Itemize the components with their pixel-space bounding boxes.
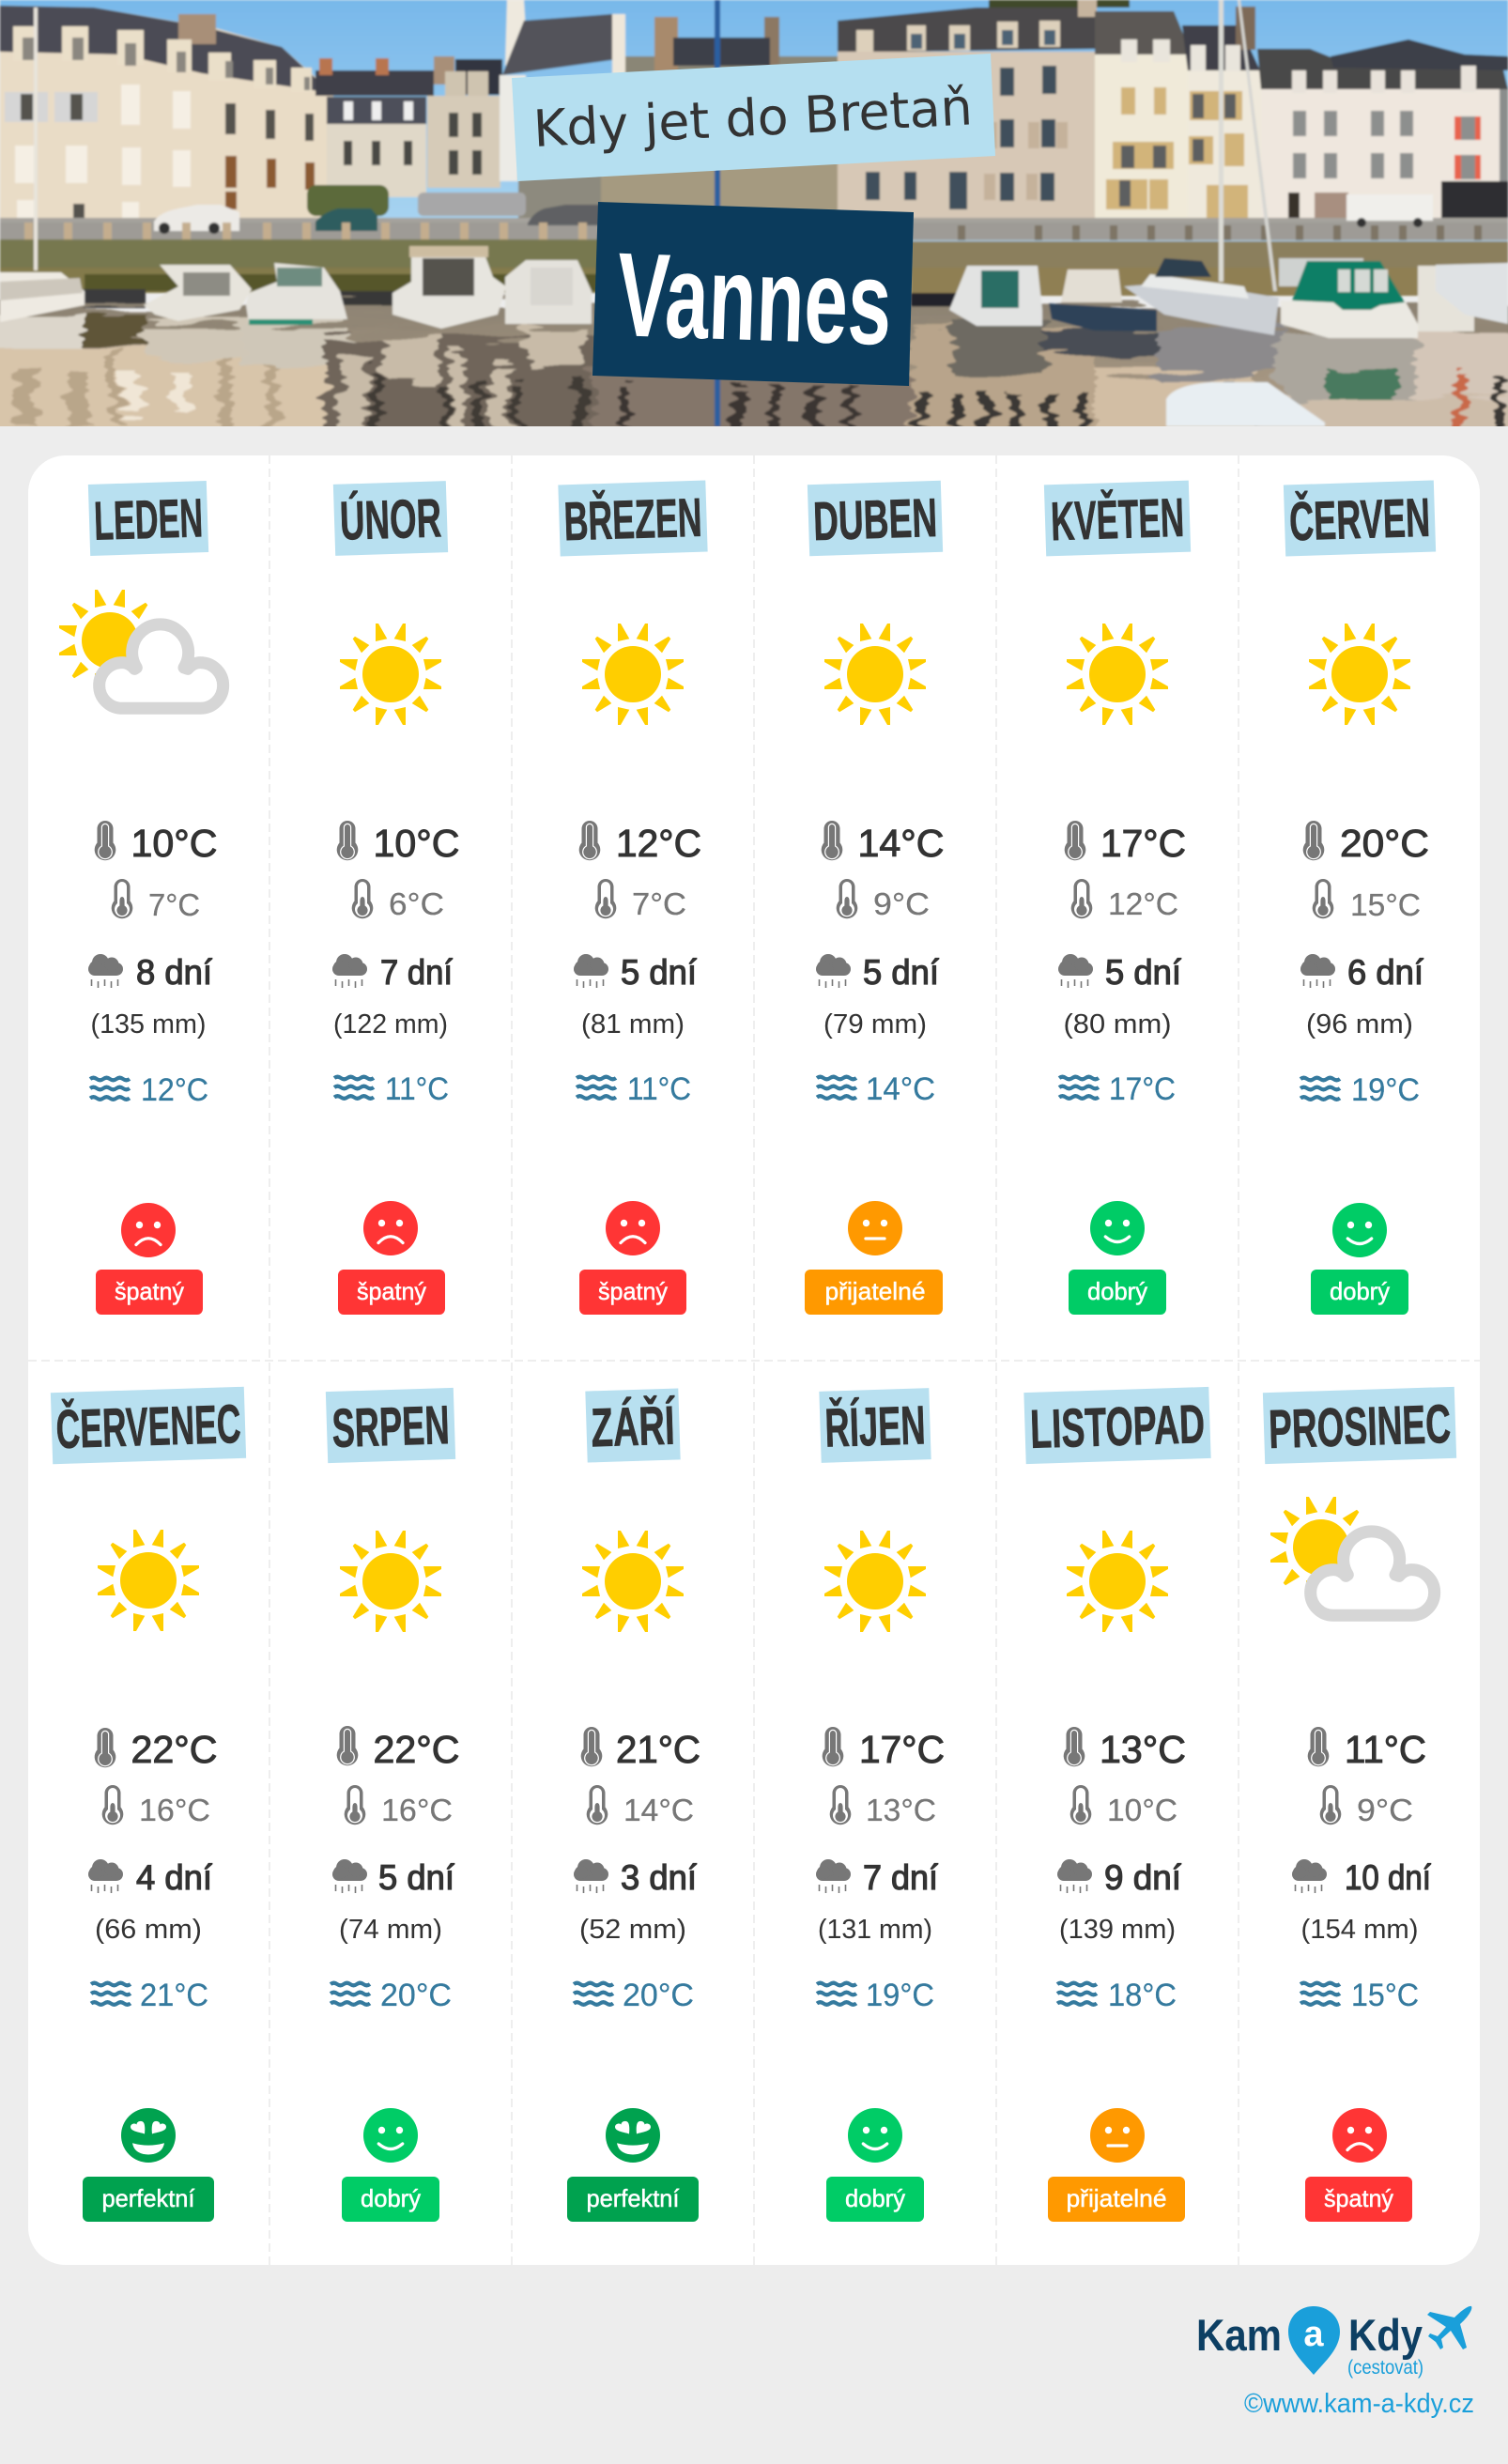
rating badge: špatný [1324, 2184, 1393, 2212]
banner: Vannes: Vannes [615, 227, 894, 370]
low temperature [1320, 1785, 1413, 1827]
icon: map pin: a [1303, 2315, 1324, 2354]
rating badge [83, 2177, 214, 2222]
month label [819, 1388, 931, 1463]
high temperature: 22°C [374, 1728, 460, 1771]
month label: SRPEN [331, 1394, 451, 1459]
rainy days: 5 dní [1105, 953, 1182, 992]
rating face [121, 1203, 176, 1257]
low temperature: 16°C [139, 1793, 210, 1827]
dock [75, 289, 146, 308]
high temperature [95, 821, 218, 865]
icon: sun [582, 1531, 684, 1632]
rating badge [826, 2177, 924, 2222]
high temperature [1308, 1727, 1426, 1771]
rainy days: 3 dní [621, 1858, 698, 1897]
water temperature: 17°C [1109, 1071, 1176, 1107]
rating badge: dobrý [845, 2184, 905, 2212]
street [0, 218, 1508, 240]
rainy days [88, 953, 213, 992]
water temperature [331, 1978, 452, 2013]
month label: KVĚTEN [1050, 487, 1185, 552]
rating face [606, 2108, 660, 2163]
high temperature: 13°C [1100, 1728, 1186, 1771]
high temperature: 14°C [858, 822, 945, 865]
rating badge [1305, 2177, 1412, 2222]
month label [585, 1388, 681, 1463]
rainy days: 5 dní [378, 1858, 455, 1897]
month: září [567, 1388, 700, 2222]
rating badge [567, 2177, 699, 2222]
rainy days [332, 953, 454, 992]
high temperature: 11°C [1345, 1728, 1426, 1771]
right stone building [838, 8, 1095, 53]
icon: sun [1067, 1531, 1168, 1632]
rating badge [805, 1270, 943, 1315]
water temperature [817, 1978, 934, 2013]
month label [558, 481, 708, 556]
icon: airplane [1427, 2306, 1471, 2349]
low temperature: 10°C [1107, 1793, 1177, 1827]
rating badge [579, 1270, 686, 1315]
rainfall: (80 mm) [1063, 1009, 1172, 1040]
rainy days: 5 dní [621, 953, 698, 992]
rating badge: dobrý [361, 2184, 421, 2212]
low temperature [595, 879, 686, 921]
high temperature [581, 1727, 700, 1771]
rainy days: 10 dní [1345, 1858, 1432, 1897]
month label: LISTOPAD [1029, 1394, 1206, 1460]
icon: partly cloudy [59, 590, 223, 708]
month label [1023, 1387, 1211, 1464]
high temperature: 17°C [1100, 822, 1186, 865]
high temperature [579, 821, 701, 865]
rainy days: 6 dní [1347, 953, 1424, 992]
rating badge [1311, 1270, 1408, 1315]
water temperature: 19°C [866, 1978, 934, 2013]
high temperature: 20°C [1340, 822, 1429, 865]
logo: Kam a Kdy [1196, 2306, 1471, 2379]
high temperature [337, 1726, 460, 1771]
rating face [848, 1201, 902, 1255]
month label [326, 1388, 455, 1463]
water temperature: 11°C [385, 1071, 449, 1107]
month: červenec [51, 1387, 246, 2222]
rainfall: (139 mm) [1059, 1915, 1176, 1945]
high temperature [1303, 821, 1429, 865]
month label: DUBEN [812, 487, 938, 552]
month: červen [1284, 481, 1436, 1315]
rainy days: 7 dní [863, 1858, 939, 1897]
rainy days [88, 1858, 213, 1897]
month: duben [805, 481, 945, 1315]
month: říjen [816, 1388, 945, 2222]
icon: sun [582, 624, 684, 725]
month label: BŘEZEN [563, 487, 703, 552]
month: březen [558, 481, 708, 1315]
icon: map pin [1288, 2306, 1340, 2375]
water temperature [577, 1071, 691, 1107]
rating face [363, 1201, 418, 1255]
rainfall: (131 mm) [818, 1915, 932, 1945]
low temperature: 6°C [389, 886, 444, 921]
rating badge: přijatelné [824, 1277, 926, 1305]
high temperature: 10°C [131, 822, 218, 865]
icon: sun [1309, 624, 1410, 725]
low temperature: 7°C [148, 887, 200, 922]
high temperature: 22°C [131, 1728, 218, 1771]
rainy days [574, 1858, 698, 1897]
water temperature: 14°C [866, 1071, 935, 1107]
water temperature [574, 1978, 694, 2013]
logo: Kam a Kdy: Kam [1196, 2310, 1282, 2360]
low temperature: 14°C [623, 1793, 694, 1827]
left building [0, 12, 334, 220]
rating badge: perfektní [586, 2184, 680, 2212]
high temperature: 10°C [374, 822, 460, 865]
low temperature: 9°C [873, 886, 930, 921]
month: květen [1044, 481, 1191, 1315]
rating face [606, 1201, 660, 1255]
rating badge: dobrý [1087, 1277, 1147, 1305]
rainy days: 7 dní [380, 953, 454, 992]
month label [1284, 481, 1436, 556]
rainy days: 9 dní [1104, 1858, 1182, 1897]
water temperature [91, 1978, 208, 2013]
panel: climate calendar [28, 455, 1480, 2265]
icon: sun [824, 1531, 926, 1632]
month label [1044, 481, 1191, 556]
rating badge [338, 1270, 445, 1315]
rainy days [332, 1858, 455, 1897]
low temperature: 13°C [866, 1793, 936, 1827]
rating face [363, 2108, 418, 2163]
low temperature [830, 1785, 936, 1827]
logo: Kam a Kdy: Kdy [1348, 2310, 1423, 2360]
low temperature: 15°C [1350, 887, 1421, 922]
low temperature [587, 1785, 694, 1827]
low temperature: 7°C [632, 886, 686, 921]
masts [1219, 0, 1223, 282]
month label: LEDEN [93, 487, 204, 552]
low temperature [112, 879, 200, 922]
low temperature [345, 1785, 453, 1827]
low temperature [1313, 879, 1421, 922]
rainfall: (81 mm) [581, 1009, 685, 1040]
high temperature [1065, 821, 1186, 865]
water with rippled reflections [0, 293, 1508, 426]
rating face [1090, 2108, 1145, 2163]
icon: sun [824, 624, 926, 725]
high temperature: 21°C [616, 1728, 700, 1771]
rainy days: 5 dní [863, 953, 940, 992]
rainy days: 4 dní [136, 1858, 213, 1897]
icon: sun [340, 1531, 441, 1632]
rainfall: (122 mm) [333, 1009, 448, 1040]
low temperature: 16°C [381, 1793, 453, 1827]
month label [51, 1387, 246, 1464]
low temperature: 12°C [1108, 886, 1178, 921]
logo: Kam a Kdy: (cestovat) [1347, 2357, 1423, 2379]
month label: ŘÍJEN [824, 1394, 927, 1459]
water temperature [1059, 1071, 1176, 1107]
banner: Vannes [592, 202, 914, 386]
month: prosinec [1263, 1387, 1456, 2222]
water temperature: 21°C [140, 1978, 208, 2013]
month: srpen [326, 1388, 460, 2222]
rainy days [574, 953, 698, 992]
banner: Kdy jet do Bretaň [512, 54, 995, 181]
rainfall: (96 mm) [1306, 1009, 1413, 1040]
rating badge: špatný [115, 1277, 184, 1305]
high temperature: 12°C [616, 822, 701, 865]
high temperature [1064, 1727, 1186, 1771]
rainy days [1058, 953, 1182, 992]
water temperature [1300, 1072, 1420, 1108]
rating badge: špatný [598, 1277, 668, 1305]
rating face [1332, 2108, 1387, 2163]
low temperature [837, 879, 930, 921]
high temperature [337, 821, 460, 865]
rainy days: 8 dní [136, 953, 213, 992]
rainfall: (79 mm) [823, 1009, 927, 1040]
rainy days [816, 953, 940, 992]
water temperature: 11°C [627, 1071, 691, 1107]
month: leden [59, 481, 223, 1315]
rating badge: perfektní [101, 2184, 195, 2212]
rainfall: (135 mm) [90, 1009, 207, 1040]
rating badge [96, 1270, 203, 1315]
rainfall: (74 mm) [339, 1915, 442, 1945]
month label: ÚNOR [339, 487, 442, 552]
high temperature [822, 821, 945, 865]
bollards [24, 223, 587, 239]
water temperature: 19°C [1351, 1072, 1420, 1108]
rainy days [1300, 953, 1424, 992]
high temperature [823, 1727, 945, 1771]
water temperature [90, 1072, 208, 1108]
low temperature [1070, 1785, 1177, 1827]
icon: sun [98, 1530, 199, 1631]
month: listopad [1023, 1387, 1211, 2222]
rainy days [1057, 1858, 1182, 1897]
boats [0, 272, 85, 322]
white buildings [1095, 11, 1193, 56]
month label: ČERVENEC [55, 1394, 242, 1460]
rating face [848, 2108, 902, 2163]
month label [808, 481, 943, 556]
low temperature [102, 1785, 210, 1827]
water temperature [1057, 1978, 1177, 2013]
icon: partly cloudy [1270, 1497, 1435, 1615]
rating face [121, 2108, 176, 2163]
rating badge: přijatelné [1067, 2184, 1166, 2212]
rating badge: dobrý [1330, 1277, 1390, 1305]
rating badge [1069, 1270, 1166, 1315]
water temperature [1300, 1978, 1419, 2013]
water temperature [334, 1071, 449, 1107]
month: únor [332, 481, 460, 1315]
low temperature [1071, 879, 1178, 921]
quay wall [0, 239, 601, 272]
month label [88, 481, 208, 556]
header photo: Vannes harbour [0, 0, 1508, 426]
water temperature: 15°C [1351, 1978, 1419, 2013]
water temperature: 20°C [623, 1978, 694, 2013]
vehicles and bush [154, 205, 239, 231]
water temperature: 18°C [1108, 1978, 1177, 2013]
low temperature: 9°C [1357, 1793, 1413, 1827]
rating badge [342, 2177, 439, 2222]
rainfall: (52 mm) [579, 1915, 686, 1945]
rating face [1332, 1203, 1387, 1257]
banner: Kdy jet do Bretaň: Kdy jet do Bretaň [531, 77, 974, 159]
water temperature [817, 1071, 935, 1107]
water temperature: 20°C [380, 1978, 452, 2013]
rainfall: (66 mm) [95, 1915, 202, 1945]
icon: sun [1067, 624, 1168, 725]
rainy days [1292, 1858, 1432, 1897]
rating face [1090, 1201, 1145, 1255]
month label: ZÁŘÍ [591, 1395, 677, 1458]
middle buildings [315, 70, 434, 96]
low temperature [352, 879, 444, 921]
rating badge [1048, 2177, 1185, 2222]
water temperature: 12°C [141, 1072, 208, 1108]
icon: sun [340, 624, 441, 725]
high temperature: 17°C [859, 1728, 945, 1771]
month label [333, 481, 448, 556]
website credit: ©www.kam-a-kdy.cz [1244, 2389, 1474, 2419]
rainy days [816, 1858, 939, 1897]
rating badge: špatný [357, 1277, 426, 1305]
rainfall: (154 mm) [1301, 1915, 1418, 1945]
